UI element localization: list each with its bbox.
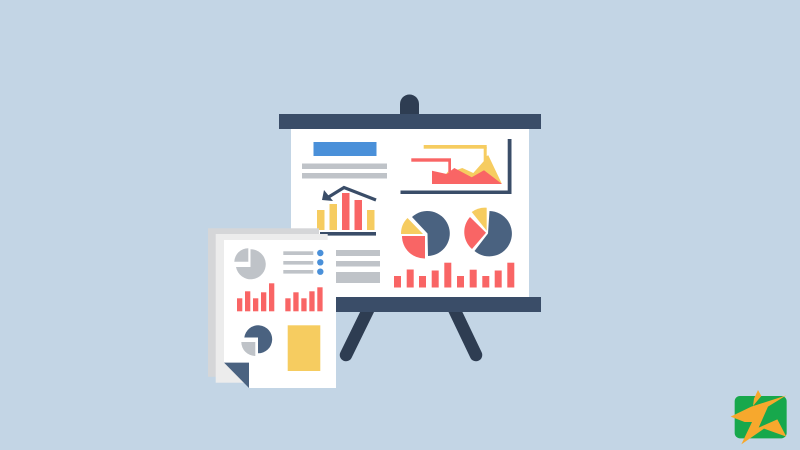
easel legs [346, 306, 476, 355]
blue heading block [314, 142, 376, 156]
bar chart with arrow [317, 188, 376, 236]
paper yellow block [288, 325, 320, 371]
paper grey list [283, 251, 313, 274]
board white panel [291, 125, 529, 301]
paper fold corner [224, 363, 249, 388]
grey text lines [302, 164, 387, 178]
pie chart left [401, 211, 450, 259]
paper grey pie [234, 248, 266, 279]
logo green badge [735, 396, 787, 438]
pie chart right [464, 208, 512, 256]
hanging knob [400, 94, 419, 116]
paper stack back sheet [208, 228, 319, 377]
board text lines beside paper [330, 250, 380, 283]
paper blue dots [317, 250, 323, 275]
paper bar chart left [237, 283, 274, 311]
logo [731, 390, 787, 444]
area chart [400, 139, 512, 194]
logo orange bolt [731, 390, 786, 444]
board bottom bar [279, 297, 541, 312]
board top bar [279, 114, 541, 129]
paper bar chart right [285, 287, 323, 311]
paper lower pie [241, 325, 272, 356]
paper front sheet [224, 240, 336, 388]
paper stack middle sheet [216, 234, 328, 383]
bar chart bottom [394, 263, 514, 288]
